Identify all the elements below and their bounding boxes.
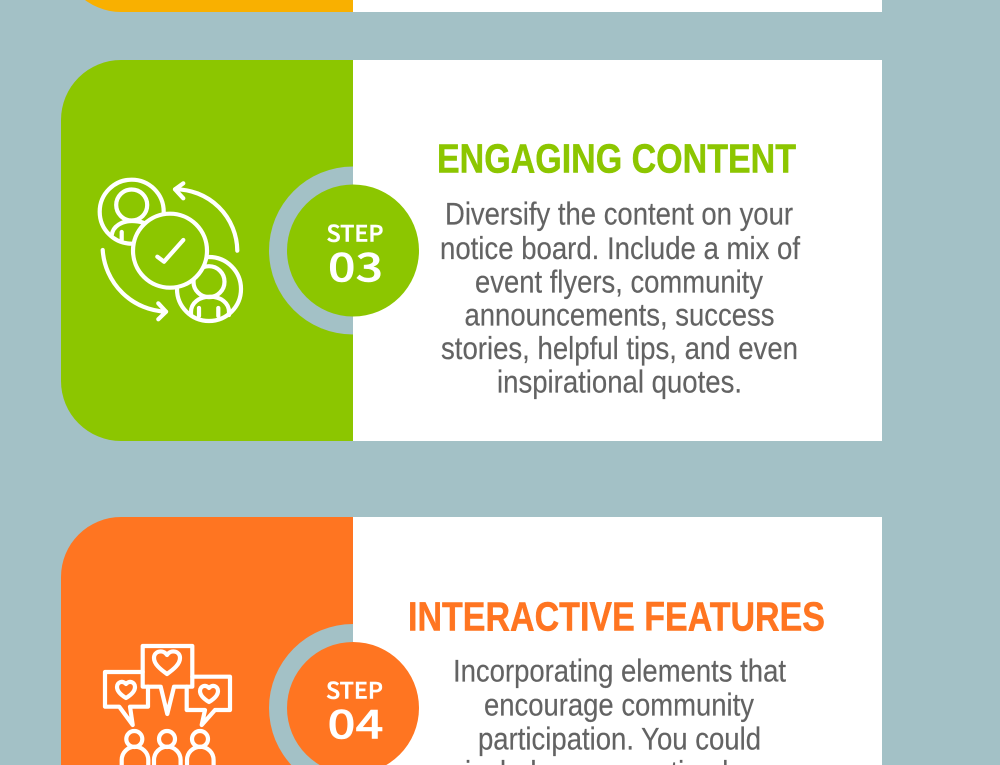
step 3 ring (269, 166, 353, 334)
step 3 description: stories, helpful tips, and even (441, 330, 798, 366)
step 3 description: event flyers, community (475, 263, 763, 299)
step 4 badge: 04 (328, 692, 384, 750)
step 3 badge (287, 184, 419, 316)
step 4 description: encourage community (484, 687, 754, 723)
step 4 description: participation. You could (478, 720, 761, 756)
step 4 ring (269, 624, 353, 765)
step 3 heading: ENGAGING CONTENT (437, 136, 796, 182)
step 3 badge: 03 (328, 236, 383, 294)
step 4 description: Incorporating elements that (453, 653, 786, 689)
step 3 description: announcements, success (464, 296, 774, 332)
panel: step 4 interactive features (61, 517, 882, 765)
step 4 card body (353, 517, 882, 765)
step 3 badge: STEP (326, 217, 384, 249)
step 4 description (453, 653, 786, 765)
panel: previous step card remnant (61, 0, 882, 12)
step 3 description: notice board. Include a mix of (440, 230, 800, 266)
step 4 badge: STEP (326, 673, 383, 705)
step 3 description: inspirational quotes. (497, 363, 742, 399)
panel: step 3 engaging content (61, 60, 882, 441)
step 4 coloured side panel (61, 517, 353, 765)
step 4 heading: INTERACTIVE FEATURES (408, 594, 825, 640)
step 3 card body (353, 60, 882, 441)
icon: community speech bubbles with hearts (105, 646, 230, 765)
icon: people exchange with check mark (100, 180, 241, 321)
step 3 description (440, 196, 800, 399)
step 3 description: Diversify the content on your (445, 196, 793, 232)
step 3 coloured side panel (61, 60, 353, 441)
step 4 badge (287, 642, 419, 765)
